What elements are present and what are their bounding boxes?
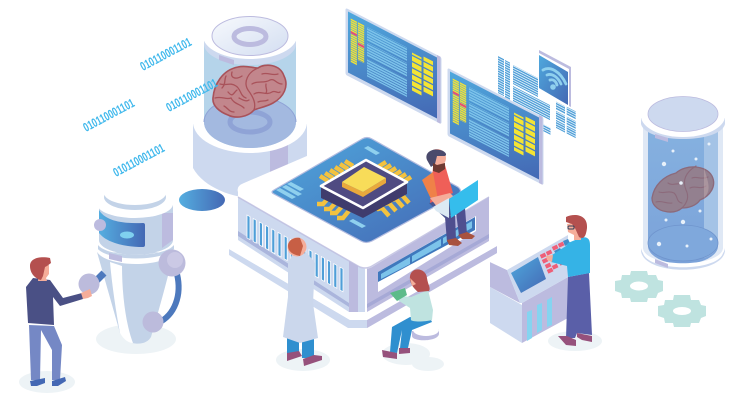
binary code strings: 010110001101 <box>138 35 194 74</box>
laptop <box>433 180 478 218</box>
icon: wifi card <box>537 50 572 107</box>
circuit board <box>272 138 460 242</box>
person: man at robot <box>19 257 92 393</box>
binary code strings: 010110001101 <box>164 76 220 115</box>
CPU chip <box>321 160 407 218</box>
tube bubbles <box>657 142 712 248</box>
binary code strings <box>81 35 220 180</box>
person: scientist in lab coat <box>276 238 330 371</box>
screen panel 2 <box>448 68 544 185</box>
person: operator at console <box>546 215 602 351</box>
robot <box>78 181 186 354</box>
platform with CPU <box>229 132 497 328</box>
person: woman with tablet <box>382 269 444 371</box>
binary code strings: 010110001101 <box>81 96 137 135</box>
robot arms and joints <box>78 250 186 332</box>
binary code strings: 010110001101 <box>111 141 167 180</box>
control console <box>490 225 570 343</box>
icon: red brain <box>213 65 286 117</box>
jar: right brain tube <box>641 95 725 270</box>
side vent slats <box>247 215 343 292</box>
gold pins <box>317 161 411 218</box>
screen panel 1 <box>346 8 442 124</box>
floor hole ellipse <box>179 189 225 211</box>
jar: top-left brain container <box>193 13 307 198</box>
keypad <box>540 242 565 274</box>
icon: grey brain <box>652 166 714 212</box>
board labels <box>276 146 380 228</box>
front window with data bars <box>378 216 476 292</box>
gears <box>615 271 706 327</box>
background text lines and wifi card <box>498 50 576 148</box>
person: man seated with laptop <box>422 149 478 246</box>
